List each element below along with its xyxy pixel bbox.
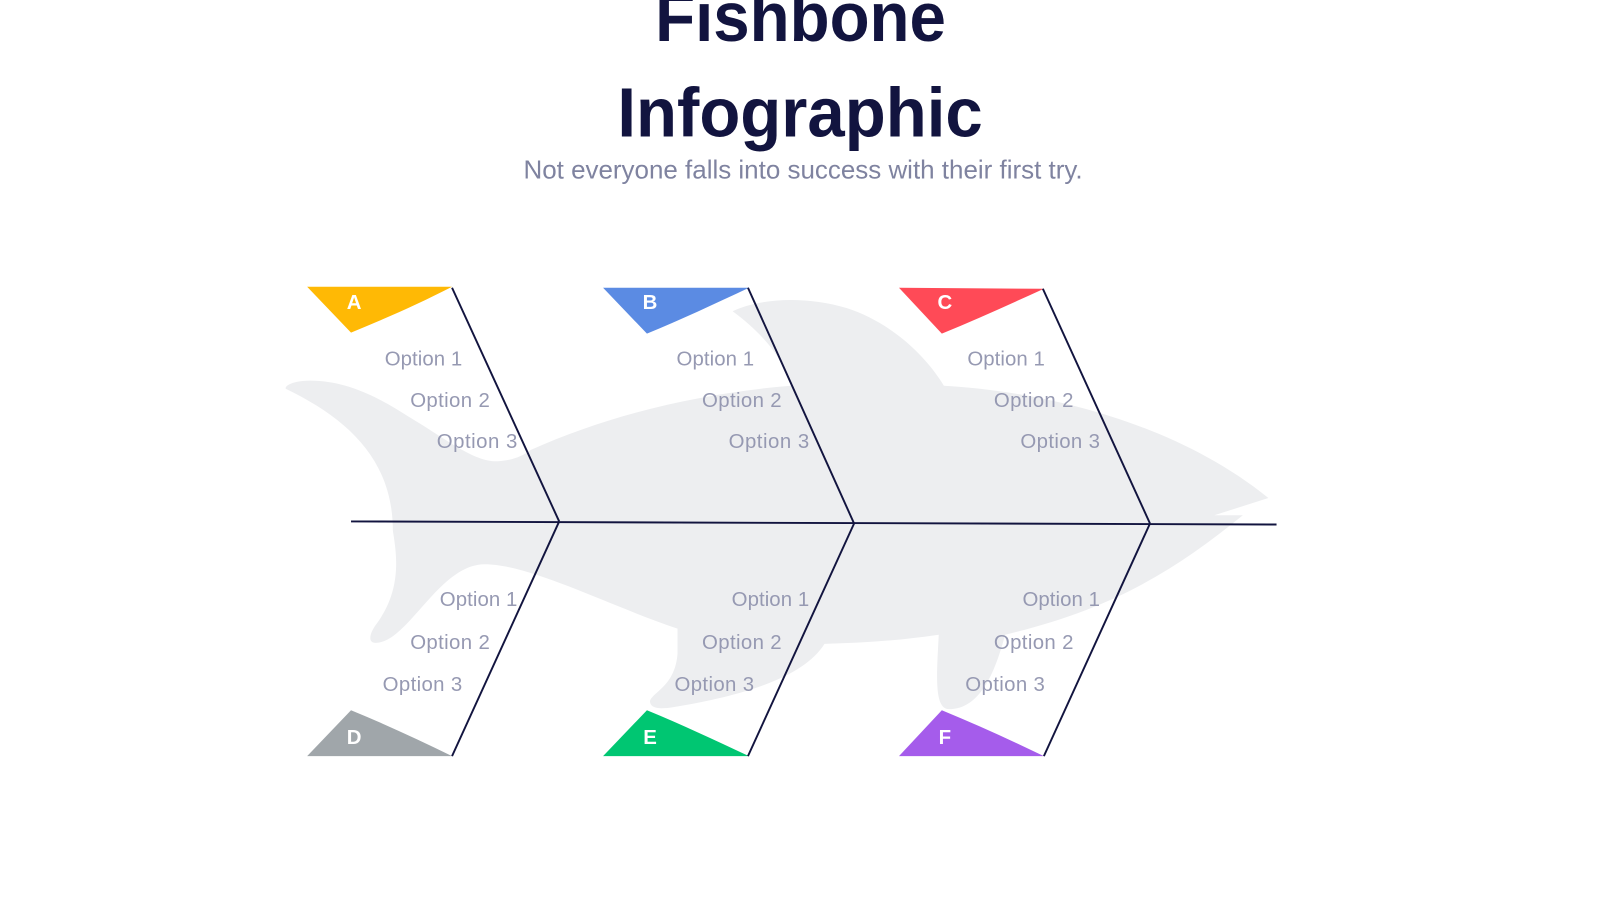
options E: Option 1 xyxy=(732,589,809,611)
options F: Option 1 xyxy=(1022,589,1100,611)
branch F xyxy=(899,523,1150,756)
options C: Option 2 xyxy=(994,390,1073,412)
flag F: F xyxy=(939,727,951,749)
bone A xyxy=(452,288,559,521)
bone E xyxy=(748,523,854,756)
options D: Option 3 xyxy=(383,674,462,696)
flag B: B xyxy=(643,292,657,314)
flag F xyxy=(899,710,1044,756)
flag E: E xyxy=(643,727,657,749)
options B: Option 1 xyxy=(677,348,754,370)
options F xyxy=(965,589,1100,696)
options D: Option 1 xyxy=(440,589,517,611)
options E: Option 3 xyxy=(674,674,754,696)
title xyxy=(617,0,983,152)
branch A xyxy=(307,287,559,521)
flag C: C xyxy=(938,292,953,314)
options A: Option 1 xyxy=(385,348,462,370)
flag A: A xyxy=(347,292,362,314)
title: Infographic xyxy=(617,74,983,152)
options E xyxy=(674,589,809,696)
options A: Option 3 xyxy=(437,431,517,453)
fish silhouette background xyxy=(286,300,1268,709)
fishbone spine xyxy=(351,521,1277,524)
options A xyxy=(385,348,517,453)
flag D: D xyxy=(347,727,361,749)
bone F xyxy=(1044,523,1150,756)
options D xyxy=(383,589,517,696)
bone B xyxy=(748,288,854,523)
flag C xyxy=(899,288,1044,334)
subtitle: Not everyone falls into success with their first try. xyxy=(523,157,1083,185)
branch E xyxy=(603,523,854,756)
options C xyxy=(967,348,1100,453)
options D: Option 2 xyxy=(410,632,490,654)
options B: Option 3 xyxy=(729,431,809,453)
branch C xyxy=(899,288,1150,523)
flag D xyxy=(307,710,452,756)
options F: Option 3 xyxy=(965,674,1045,696)
bone C xyxy=(1043,289,1150,523)
options F: Option 2 xyxy=(994,632,1073,654)
bone D xyxy=(452,521,559,756)
options B: Option 2 xyxy=(702,390,782,412)
branch B xyxy=(603,288,854,523)
flag B xyxy=(603,288,749,334)
branch D xyxy=(307,521,559,756)
options A: Option 2 xyxy=(410,390,490,412)
options C: Option 1 xyxy=(967,348,1045,370)
options B xyxy=(677,348,809,453)
options C: Option 3 xyxy=(1020,431,1100,453)
options E: Option 2 xyxy=(702,632,782,654)
flag E xyxy=(603,710,749,756)
flag A xyxy=(307,287,452,333)
